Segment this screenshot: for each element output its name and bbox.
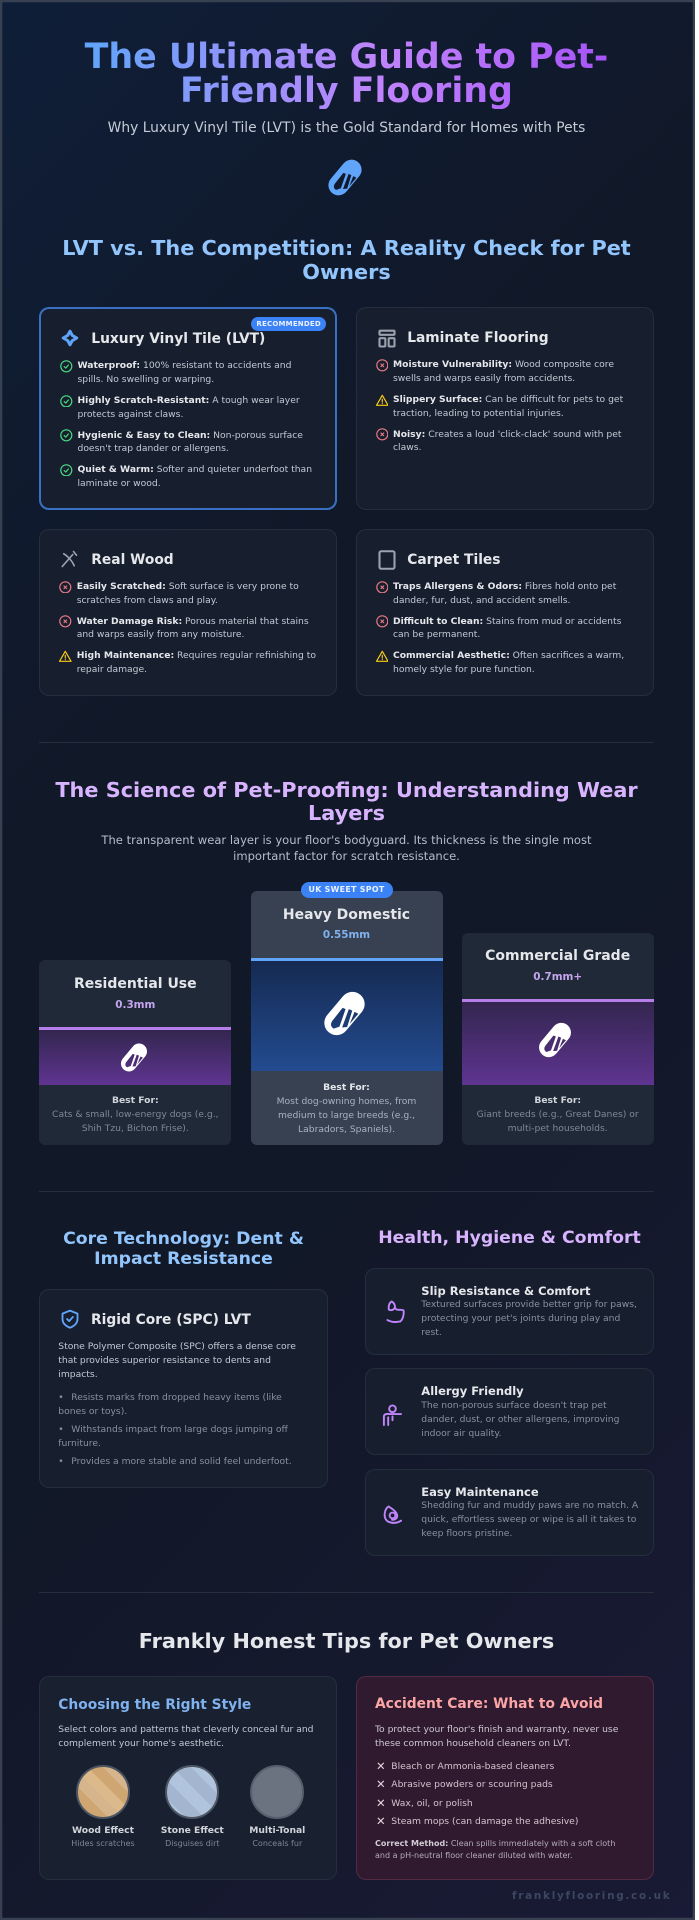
note: correct method: and a pH-neutral floor cleaner diluted with water.	[375, 1851, 572, 1860]
heading: carpet tiles: Carpet Tiles	[407, 552, 500, 568]
note: correct method: Correct Method: Clean spills immediately with a soft cloth	[375, 1839, 615, 1848]
icon: paw header	[328, 160, 362, 196]
section heading: comparison: Owners	[302, 260, 391, 284]
text: best for: Best For:	[323, 1082, 370, 1093]
section heading: health: Health, Hygiene & Comfort	[378, 1228, 641, 1248]
item: waterproof	[60, 360, 291, 385]
list: SPC benefits	[58, 1392, 292, 1467]
avoid: abrasive: ✕	[376, 1777, 386, 1791]
section intro: The transparent wear layer is your floor's bodyguard. Its thickness is the single most	[101, 832, 592, 846]
item: aesthetic	[376, 650, 624, 675]
list: cleaners to avoid	[375, 1760, 625, 1834]
title	[39, 40, 654, 108]
badge: recommended: RECOMMENDED	[256, 320, 321, 328]
icon: paw	[324, 992, 365, 1036]
label: multi-tonal	[237, 1825, 317, 1850]
description: maintenance: keep floors pristine.	[421, 1528, 512, 1539]
badge: UK sweet spot: UK SWEET SPOT	[308, 885, 385, 894]
item: slippery	[376, 394, 623, 419]
panel: slip resistance	[365, 1268, 654, 1355]
label: wood	[63, 1825, 143, 1850]
heading: commercial: Commercial Grade	[485, 948, 630, 964]
label: multi-tonal: Multi-Tonal	[249, 1825, 305, 1836]
icon: shield	[62, 1310, 78, 1329]
panel: allergy friendly	[365, 1368, 654, 1455]
item: slippery: Slippery Surface: Can be difficult for pets to get	[393, 394, 623, 405]
item: difficult: Difficult to Clean: Stains from mud or accidents	[393, 616, 621, 627]
item: quiet: laminate or wood.	[77, 478, 161, 489]
heading: rigid core: Rigid Core (SPC) LVT	[91, 1312, 251, 1328]
icon: square	[378, 550, 396, 570]
label: stone	[152, 1825, 232, 1850]
avoid: steam: Steam mops (can damage the adhesive)	[391, 1816, 578, 1827]
item: difficult	[376, 615, 621, 640]
paragraph: style: complement your home's aesthetic.	[58, 1738, 224, 1749]
heading: heavy domestic: Heavy Domestic	[283, 907, 410, 923]
item: slippery: traction, leading to potential injuries.	[393, 408, 564, 419]
value: 0.7mm+: 0.7mm+	[533, 971, 582, 983]
text: best for: multi-pet households.	[508, 1123, 608, 1134]
item: waterproof: Waterproof: 100% resistant to accidents and	[77, 360, 291, 371]
item: aesthetic: homely style for pure function.	[393, 664, 535, 675]
item: hygienic	[60, 429, 303, 454]
label: multi-tonal: Conceals fur	[252, 1839, 302, 1848]
bullet: impact: Withstands impact from large dogs jumping off	[71, 1424, 288, 1435]
swatch: wood	[76, 1765, 130, 1819]
text: best for	[277, 1082, 416, 1135]
section heading: core technology: Core Technology: Dent &	[63, 1228, 304, 1248]
value: 0.55mm: 0.55mm	[323, 929, 370, 941]
item: quiet	[60, 464, 312, 489]
icon: sparkle	[62, 330, 78, 346]
avoid: steam: ✕	[376, 1814, 386, 1828]
paragraph: accident: these common household cleaners on LVT.	[375, 1738, 571, 1749]
item: maintenance: High Maintenance: Requires regular refinishing to	[77, 650, 316, 661]
label: stone: Stone Effect	[161, 1825, 224, 1836]
item: scratched: scratches from claws and play.	[77, 595, 218, 606]
item: scratch resistant: Highly Scratch-Resistant: A tough wear layer	[77, 395, 300, 406]
label: wood: Wood Effect	[72, 1825, 134, 1836]
subtitle: Why Luxury Vinyl Tile (LVT) is the Gold Standard for Homes with Pets	[108, 120, 585, 136]
description: slip	[421, 1299, 637, 1338]
avoid: abrasive: Abrasive powders or scouring pads	[391, 1779, 553, 1790]
item: scratch resistant: protects against claws.	[77, 409, 183, 420]
avoid: wax: ✕	[376, 1796, 386, 1810]
section heading: comparison: LVT vs. The Competition: A Reality Check for Pet	[62, 236, 631, 260]
item: noisy: Noisy: Creates a loud 'click-clack' sound with pet	[393, 429, 621, 440]
text: best for: Best For:	[112, 1095, 159, 1106]
item: noisy: claws.	[393, 442, 421, 453]
text: best for: Shih Tzu, Bichon Frise).	[82, 1123, 189, 1134]
description: maintenance: Shedding fur and muddy paws are no match. A	[421, 1500, 638, 1511]
item: waterproof: spills. No swelling or warping.	[77, 374, 214, 385]
bullet: impact: furniture.	[58, 1438, 101, 1449]
icon: layout	[378, 330, 396, 348]
title: Friendly Flooring	[180, 71, 513, 111]
title: allergy: Allergy Friendly	[421, 1384, 524, 1398]
wear layer band	[39, 1027, 231, 1085]
description: maintenance: quick, effortless sweep or wipe is all it takes to	[421, 1514, 636, 1525]
panel: accident care	[356, 1676, 654, 1880]
section heading: wear layers: The Science of Pet-Proofing: Understanding Wear	[55, 778, 638, 802]
wear layer band	[462, 999, 654, 1085]
icon: pickaxe	[61, 550, 78, 568]
section intro	[101, 832, 592, 863]
text: best for: Giant breeds (e.g., Great Danes) or	[477, 1109, 639, 1120]
text: best for: Most dog-owning homes, from	[277, 1096, 416, 1107]
description: maintenance	[421, 1500, 638, 1539]
avoid: bleach: ✕	[376, 1759, 386, 1773]
icon: paw	[121, 1044, 147, 1072]
heading: choosing: Choosing the Right Style	[58, 1697, 251, 1713]
paragraph: SPC	[58, 1341, 296, 1380]
description: allergy: The non-porous surface doesn't trap pet	[421, 1400, 607, 1411]
bullet: marks	[58, 1392, 282, 1417]
swatch: multi-tonal	[250, 1765, 304, 1819]
item: quiet: Quiet & Warm: Softer and quieter underfoot than	[77, 464, 312, 475]
heading: laminate: Laminate Flooring	[407, 330, 549, 346]
item: hygienic: doesn't trap dander or allergens.	[77, 443, 229, 454]
text: best for: medium to large breeds (e.g.,	[278, 1110, 415, 1121]
section heading: tips: Frankly Honest Tips for Pet Owners	[139, 1629, 554, 1653]
item: scratched: Easily Scratched: Soft surface is very prone to	[77, 581, 299, 592]
icon: swirl	[384, 1506, 402, 1524]
panel: laminate flooring	[356, 307, 654, 510]
paragraph: SPC: Stone Polymer Composite (SPC) offers a dense core	[58, 1341, 296, 1352]
panel: easy maintenance	[365, 1469, 654, 1556]
item: difficult: can be permanent.	[393, 629, 480, 640]
description: slip: rest.	[421, 1327, 442, 1338]
panel: carpet tiles	[356, 529, 654, 696]
bullet: marks: bones or toys).	[58, 1406, 127, 1417]
description: allergy: indoor air quality.	[421, 1428, 501, 1439]
paragraph: style	[58, 1723, 314, 1751]
item: aesthetic: Commercial Aesthetic: Often sacrifices a warm,	[393, 650, 624, 661]
panel: commercial grade	[462, 933, 654, 1145]
bullet: stable: Provides a more stable and solid feel underfoot.	[71, 1456, 292, 1467]
item: allergens: Traps Allergens & Odors: Fibres hold onto pet	[393, 581, 616, 592]
item: allergens	[376, 581, 616, 606]
bullet: impact	[58, 1424, 288, 1449]
paragraph: SPC: that provides superior resistance to dents and	[58, 1355, 271, 1366]
item: water damage: Water Damage Risk: Porous material that stains	[77, 616, 309, 627]
paragraph: accident: To protect your floor's finish and warranty, never use	[375, 1724, 618, 1735]
avoid: wax: Wax, oil, or polish	[391, 1798, 473, 1809]
section heading: wear layers: Layers	[308, 801, 385, 825]
paragraph: SPC: impacts.	[58, 1369, 98, 1380]
section heading: comparison	[62, 236, 631, 284]
item: noisy	[376, 428, 622, 453]
footer: site name: franklyflooring.co.uk	[512, 1890, 671, 1902]
bullet: impact: •	[58, 1424, 64, 1435]
item: maintenance: repair damage.	[77, 664, 147, 675]
description: slip: protecting your pet's joints during play and	[421, 1313, 620, 1324]
title: The Ultimate Guide to Pet-	[85, 36, 608, 76]
heading: real wood: Real Wood	[91, 552, 174, 568]
item: scratched	[59, 581, 299, 606]
heading: accident: Accident Care: What to Avoid	[375, 1696, 603, 1712]
title: slip: Slip Resistance & Comfort	[421, 1284, 590, 1298]
panel: luxury vinyl tile	[39, 307, 337, 510]
icon: paw pad	[386, 1300, 405, 1323]
panel: rigid core	[39, 1289, 328, 1488]
item: scratch resistant	[60, 395, 300, 420]
text: best for	[477, 1095, 639, 1134]
section heading: core technology	[63, 1228, 304, 1269]
text: best for: Best For:	[534, 1095, 581, 1106]
description: slip: Textured surfaces provide better grip for paws,	[421, 1299, 637, 1310]
item: moisture: Moisture Vulnerability: Wood composite core	[393, 359, 614, 370]
description: allergy: dander, dust, or other allergens, improving	[421, 1414, 619, 1425]
badge: recommended	[251, 317, 326, 331]
paragraph: style: Select colors and patterns that cleverly conceal fur and	[58, 1724, 314, 1735]
item: moisture: swells and warps easily from accidents.	[393, 373, 575, 384]
panel: residential use	[39, 960, 231, 1145]
swatch: stone	[165, 1765, 219, 1819]
note: correct method	[375, 1838, 615, 1861]
avoid: bleach: Bleach or Ammonia-based cleaners	[391, 1761, 554, 1772]
bullet: marks: Resists marks from dropped heavy items (like	[71, 1392, 282, 1403]
bullet: marks: •	[58, 1392, 64, 1403]
label: stone: Disguises dirt	[165, 1839, 220, 1848]
panel: heavy domestic	[250, 891, 442, 1145]
badge: UK sweet spot	[300, 882, 392, 898]
icon: person	[382, 1404, 402, 1426]
paragraph: accident	[375, 1723, 618, 1751]
wear layer band	[250, 958, 442, 1071]
panel: real wood	[39, 529, 337, 696]
icon: paw	[539, 1022, 571, 1058]
section heading: wear layers	[55, 778, 638, 825]
label: wood: Hides scratches	[71, 1839, 135, 1848]
panel: choosing style	[39, 1676, 337, 1880]
section heading: core technology: Impact Resistance	[94, 1249, 273, 1269]
avoid: wax	[375, 1797, 473, 1810]
heading: residential: Residential Use	[74, 976, 197, 992]
item: water damage	[59, 615, 309, 640]
item: allergens: dander, fur, dust, and accident smells.	[393, 595, 570, 606]
title: maintenance: Easy Maintenance	[421, 1485, 539, 1499]
bullet: stable: •	[58, 1456, 64, 1467]
text: best for: Cats & small, low-energy dogs (e.g.,	[52, 1109, 219, 1120]
value: 0.3mm: 0.3mm	[115, 998, 155, 1010]
heading: luxury vinyl tile: Luxury Vinyl Tile (LVT)	[91, 331, 265, 347]
item: moisture	[376, 359, 614, 384]
section intro: important factor for scratch resistance.	[233, 849, 460, 863]
text: best for: Labradors, Spaniels).	[298, 1124, 395, 1135]
item: hygienic: Hygienic & Easy to Clean: Non-porous surface	[77, 430, 303, 440]
text: best for	[52, 1095, 219, 1134]
description: allergy	[421, 1400, 619, 1439]
item: water damage: and warps easily from any moisture.	[77, 629, 244, 640]
item: maintenance	[59, 650, 316, 675]
